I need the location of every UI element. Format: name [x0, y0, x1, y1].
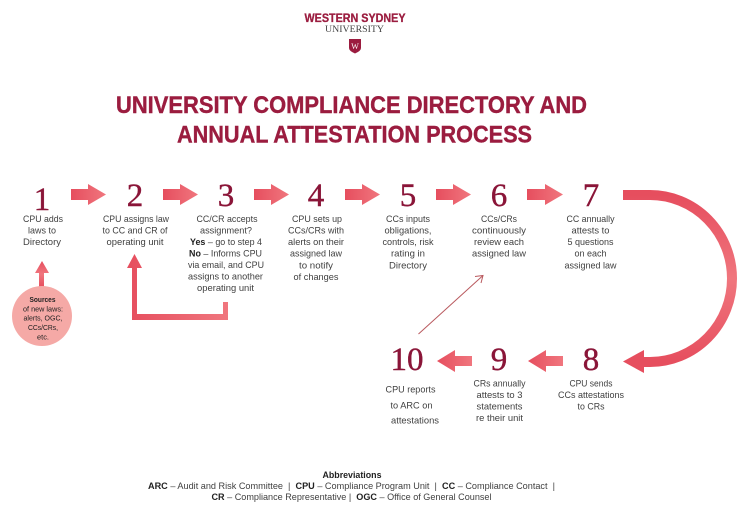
- step 2: CPU assigns law: [103, 214, 169, 225]
- step 7: CC annually: [566, 214, 615, 225]
- step 1: laws to: [28, 226, 56, 236]
- step 5: obligations,: [384, 226, 432, 236]
- step 5: Directory: [389, 260, 427, 272]
- abbreviations: ARC – Audit and Risk Committee | CPU – Compliance Program Unit | CC – Compliance Contact |: [148, 481, 555, 492]
- step 7: 7: [583, 178, 599, 214]
- step 7: assigned law: [564, 260, 617, 272]
- step 9: CRs annually: [474, 378, 526, 390]
- step 3: operating unit: [197, 283, 254, 294]
- step 10: attestations: [391, 416, 439, 426]
- step 3: No – Informs CPU: [189, 248, 262, 260]
- step 3: CC/CR accepts: [196, 214, 258, 225]
- step 5: 5: [400, 178, 416, 214]
- callout: sources of new laws: CCs/CRs,: [28, 323, 58, 332]
- arrow: sources to step 1: [35, 261, 49, 287]
- step 3: assigns to another: [188, 272, 263, 282]
- step 9: statements: [476, 402, 523, 412]
- step 10: CPU reports: [386, 384, 436, 396]
- title: ANNUAL ATTESTATION PROCESS: [177, 122, 532, 148]
- step 1: 1: [34, 182, 50, 218]
- step 5: rating in: [391, 248, 425, 260]
- step 8: CPU sends: [570, 378, 613, 390]
- step 4: alerts on their: [288, 237, 344, 248]
- step 7: attests to: [572, 226, 610, 236]
- title: [116, 93, 587, 148]
- step 2: 2: [127, 178, 143, 214]
- step 2: operating unit: [106, 237, 164, 248]
- title: UNIVERSITY COMPLIANCE DIRECTORY AND: [116, 93, 587, 119]
- step 7: 5 questions: [568, 237, 614, 248]
- step 4: 4: [308, 178, 324, 214]
- callout: sources of new laws: of new laws:: [23, 304, 63, 314]
- step 4: of changes: [294, 272, 339, 283]
- step 5: [382, 178, 434, 272]
- logo: Western Sydney University: W: [351, 42, 359, 51]
- step 3: assignment?: [200, 226, 252, 236]
- step 6: [472, 178, 526, 260]
- step 10: [386, 342, 439, 426]
- arrow: step 3 to 4: [254, 184, 289, 205]
- step 5: controls, risk: [382, 237, 434, 248]
- step 7: [564, 178, 617, 272]
- step 6: review each: [474, 237, 524, 248]
- arrow: step 9 to 10: [437, 350, 472, 372]
- abbreviations: CR – Compliance Representative | OGC – Office of General Counsel: [212, 492, 492, 503]
- step 1: [23, 182, 63, 248]
- callout: sources of new laws: [12, 286, 72, 346]
- step 3: 3: [218, 178, 234, 214]
- arrow: step 4 to 5: [345, 184, 380, 205]
- step 2: [102, 178, 169, 248]
- step 3: via email, and CPU: [188, 260, 264, 271]
- step 1: CPU adds: [23, 214, 63, 225]
- arrow: thin line from step 10 to 6: [418, 276, 483, 334]
- step 10: 10: [390, 342, 424, 378]
- step 4: to notify: [299, 260, 333, 272]
- abbreviations: Abbreviations: [322, 470, 382, 481]
- step 7: on each: [574, 248, 606, 260]
- arrow: step 1 to 2: [71, 184, 106, 205]
- arrow: curved step 7 to 8: [623, 195, 732, 373]
- step 9: 9: [491, 342, 507, 378]
- step 8: [558, 342, 624, 412]
- step 4: [288, 178, 344, 283]
- step 3: Yes – go to step 4: [190, 237, 262, 248]
- arrow: step 2 to 3: [163, 184, 198, 205]
- arrow: step 6 to 7: [527, 184, 563, 205]
- step 8: to CRs: [578, 402, 605, 412]
- arrow: step 3 back to 2: [127, 254, 228, 320]
- abbreviations: [148, 470, 555, 503]
- step 4: CCs/CRs with: [288, 226, 344, 236]
- step 10: to ARC on: [390, 400, 432, 412]
- step 6: assigned law: [472, 248, 526, 260]
- step 9: attests to 3: [476, 390, 522, 401]
- callout: sources of new laws: Sources: [30, 295, 56, 304]
- step 9: [474, 342, 526, 424]
- arrow: step 5 to 6: [436, 184, 471, 205]
- step 6: continuously: [472, 226, 526, 236]
- step 2: to CC and CR of: [102, 226, 168, 236]
- logo: Western Sydney University: UNIVERSITY: [325, 24, 385, 34]
- logo: Western Sydney University: [304, 11, 406, 54]
- step 3: [188, 178, 264, 294]
- step 6: 6: [491, 178, 507, 214]
- callout: sources of new laws: etc.: [37, 332, 49, 342]
- step 5: CCs inputs: [386, 214, 430, 225]
- step 1: Directory: [23, 237, 61, 248]
- step 8: 8: [583, 342, 599, 378]
- callout: sources of new laws: alerts, OGC,: [24, 314, 62, 322]
- arrow: step 8 to 9: [528, 350, 563, 372]
- logo: Western Sydney University: WESTERN SYDNEY: [304, 11, 406, 25]
- step 4: CPU sets up: [292, 214, 342, 225]
- step 9: re their unit: [476, 413, 523, 424]
- step 4: assigned law: [290, 248, 342, 260]
- step 8: CCs attestations: [558, 390, 624, 401]
- step 6: CCs/CRs: [481, 214, 517, 225]
